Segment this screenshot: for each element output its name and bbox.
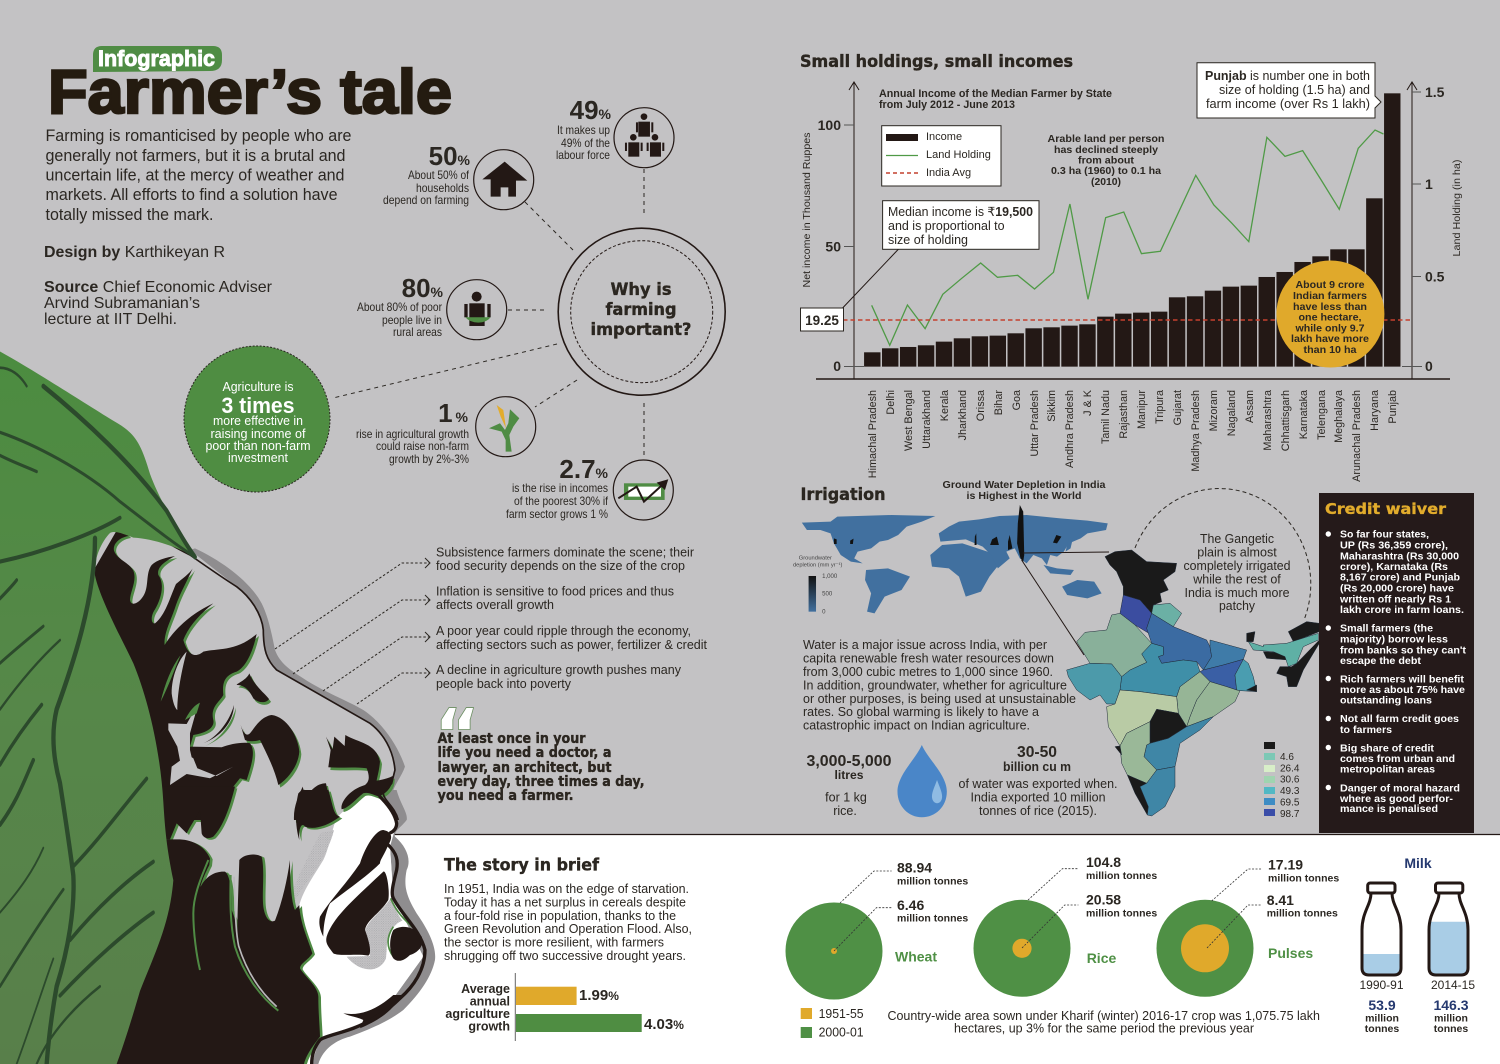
state labels: Bihar [993, 390, 1005, 415]
icon: person with green band [464, 292, 491, 326]
chart subtitle: Annual Income of the Median Farmer by State [879, 88, 1112, 100]
intro text: Farming is romanticised by people who are [46, 127, 352, 145]
bottle 2014-15: 2014-15 [1431, 978, 1475, 992]
stat: 50% households: depend on farming [383, 193, 469, 207]
state labels: Maharashtra [1262, 390, 1274, 451]
India map legend: 49.3 [1280, 786, 1300, 797]
stat: 1% agricultural growth: 1% [438, 398, 469, 428]
green turban [0, 352, 197, 1064]
chart: pulses production: 8.41 [1267, 892, 1294, 908]
credit waiver list: (Rs 20,000 crore) have [1340, 582, 1454, 594]
notes on farming risk: affects overall growth [436, 597, 554, 612]
stat: litres per kg of rice [806, 753, 892, 818]
land holding line [872, 130, 1383, 345]
stat: 1% agricultural growth: could raise non-farm [376, 439, 469, 453]
state labels: Tamil Nadu [1100, 390, 1112, 444]
text: water issue: rates. So global warming is likely to have a [803, 704, 1040, 719]
depletion legend: Groundwater [799, 556, 832, 562]
credit waiver list: from banks so they can't [1340, 644, 1467, 656]
callout: Punjab [1197, 63, 1381, 118]
bar chart: average annual agriculture growth: 4.03% [644, 1016, 684, 1033]
chart: rice production: Rice [1087, 950, 1116, 966]
state labels: Nagaland [1226, 390, 1238, 436]
India map legend: 98.7 [1280, 809, 1300, 820]
stat: 2.7% incomes: farm sector grows 1 % [506, 507, 608, 521]
notes on farming risk: A decline in agriculture growth pushes many [436, 662, 681, 677]
story text: In 1951, India was on the edge of starvation. [444, 881, 689, 896]
stat: 49% labour force: It makes up [557, 123, 610, 137]
credit waiver list: written off nearly Rs 1 [1339, 593, 1451, 605]
intro text: markets. All efforts to find a solution have [46, 186, 338, 204]
chart: pulses production: million tonnes [1267, 908, 1338, 920]
left axis values [818, 117, 841, 374]
heading: credit waiver: Credit waiver [1325, 500, 1446, 518]
stat: 50% households: About 50% of [408, 168, 470, 182]
note: arable land: from about [1078, 154, 1135, 166]
credits: Arvind Subramanian’s [44, 295, 200, 312]
bottle 2014-15: 146.3 [1433, 997, 1469, 1013]
note: arable land: 0.3 ha (1960) to 0.1 ha [1051, 165, 1161, 177]
story text: Green Revolution and Operation Flood. Also, [444, 921, 692, 936]
callout: agriculture 3 times: Agriculture is [222, 379, 294, 394]
right axis values: 0 [1425, 358, 1433, 374]
intro text: totally missed the mark. [46, 206, 214, 224]
green edge of hair [82, 534, 395, 1064]
bar chart: average annual agriculture growth: 1.99% [579, 987, 619, 1004]
depletion spikes [834, 505, 1061, 562]
stat: 80% rural: 80% [402, 273, 444, 303]
India map legend: 30.6 [1280, 775, 1300, 786]
icon: crop plant [489, 405, 519, 452]
right axis label: Land Holding (in ha) [1451, 160, 1463, 256]
callout: 9 crore farmers: have less than [1293, 301, 1367, 313]
callout: Punjab: Punjab is number one in both [1205, 69, 1370, 83]
stat: 80% rural [357, 273, 507, 340]
stat: billion cubic metres exported: of water was exported when. [958, 777, 1118, 791]
bar chart: average annual agriculture growth: growth [468, 1020, 510, 1034]
credit waiver list: more as about 75% have [1340, 684, 1465, 696]
note: Gangetic plain: India is much more [1184, 585, 1290, 600]
state labels: Goa [1011, 390, 1023, 410]
credit waiver list: lakh crore in farm loans. [1340, 604, 1464, 616]
callout: median income [843, 201, 1039, 308]
credit waiver list: Danger of moral hazard [1340, 782, 1460, 794]
state labels: Sikkim [1046, 390, 1058, 422]
stat: litres per kg of rice: 3,000-5,000 [806, 753, 892, 770]
stat: billion cubic metres exported: 30-50 [1017, 744, 1057, 761]
icon: rising arrow over banknote [618, 479, 668, 502]
chart: wheat production [786, 860, 968, 1000]
India map legend: 4.6 [1280, 752, 1294, 763]
stat: 1% agricultural growth: growth by 2%-3% [389, 452, 469, 466]
note: Gangetic plain: patchy [1219, 598, 1255, 613]
chart: rice production: million tonnes [1086, 908, 1157, 920]
axes [816, 82, 1450, 379]
chart: income and land holding by state [800, 63, 1463, 482]
intro text: uncertain life, at the mercy of weather and [46, 166, 344, 184]
quote [434, 694, 644, 804]
callout: 9 crore farmers: than 10 ha [1304, 344, 1357, 356]
depletion legend: 1,000 [822, 574, 838, 580]
story text: shrugging off two successive drought years. [444, 948, 686, 963]
state labels [867, 389, 1399, 482]
bottle 2014-15: million [1434, 1013, 1468, 1025]
callout: 9 crore farmers: lakh have more [1291, 333, 1369, 345]
chart: rice production: 104.8 [1086, 854, 1121, 870]
state labels: Himachal Pradesh [867, 390, 879, 478]
stat: 49% labour force [556, 95, 674, 168]
left axis values: 0 [833, 358, 841, 374]
right axis values [1425, 84, 1445, 374]
notes on farming risk: A poor year could ripple through the economy, [436, 623, 691, 638]
state labels: Manipur [1136, 390, 1148, 429]
India average line [843, 319, 1412, 321]
state labels: Haryana [1369, 390, 1381, 431]
chart subtitle: from July 2012 - June 2013 [879, 99, 1015, 111]
panel: the story in brief [444, 856, 692, 1041]
stat: 2.7% incomes: is the rise in incomes [512, 481, 608, 495]
note: Gangetic plain [1184, 531, 1290, 613]
production legend: 1951-55 [819, 1007, 864, 1021]
credit waiver list: Big share of credit [1340, 742, 1434, 754]
state labels: Gujarat [1172, 390, 1184, 425]
credit waiver list: outstanding loans [1340, 695, 1432, 707]
pointer lines from world map to India map [1022, 552, 1109, 655]
left axis values: 100 [818, 117, 841, 133]
leader lines from face to notes [275, 558, 430, 704]
right axis values: 1.5 [1425, 84, 1445, 100]
credit waiver list: So far four states, [1340, 529, 1429, 541]
heading: Irrigation: Irrigation [800, 485, 886, 504]
income bars [864, 93, 1400, 367]
chart: pulses production: million tonnes [1268, 873, 1339, 885]
notes on farming risk [436, 544, 707, 691]
lower face details: lips and chin [193, 797, 425, 1064]
right axis values: 0.5 [1425, 268, 1445, 284]
credit waiver list: Rich farmers will benefit [1340, 673, 1465, 685]
bar chart: average annual agriculture growth: Average [461, 982, 510, 996]
note: Kharif area sown [887, 1009, 1320, 1036]
bottle 1990-91: tonnes [1365, 1023, 1399, 1035]
callout: median income: and is proportional to [888, 219, 1005, 233]
state labels: Jharkhand [957, 390, 969, 440]
stat: 2.7% incomes: of the poorest 30% if [514, 494, 609, 508]
note: Kharif area sown: hectares, up 3% for the same period the previous year [954, 1022, 1254, 1036]
credits: Design by Karthikeyan R [44, 244, 225, 261]
note: arable land: has declined steeply [1054, 144, 1158, 156]
story text [444, 881, 692, 963]
credit waiver list: mance is penalised [1340, 803, 1438, 815]
text: water issue: Water is a major issue across India, with per [803, 637, 1048, 652]
left axis label: Net income in Thousand Ruppes [801, 132, 813, 288]
state labels: Tripura [1154, 390, 1166, 424]
bottle 2014-15 [1429, 883, 1475, 1035]
note: Gangetic plain: while the rest of [1192, 572, 1281, 587]
stat: litres per kg of rice: litres [834, 768, 864, 782]
quote: lawyer, an architect, but [438, 760, 612, 776]
note: arable land [1048, 133, 1164, 188]
icon: house [482, 162, 527, 197]
callout: agriculture 3 times: 3 times [222, 393, 294, 418]
callout: agriculture 3 times: poor than non-farm [206, 438, 310, 453]
callout: 9 crore farmers: one hectare, [1298, 312, 1362, 324]
state labels: Assam [1244, 390, 1256, 423]
chart: pulses production: 17.19 [1268, 856, 1303, 872]
credit waiver list: crore), Karnataka (Rs [1340, 561, 1448, 573]
bottle 1990-91 [1359, 883, 1404, 1035]
state labels: Kerala [939, 390, 951, 421]
stat: 49% labour force: labour force [556, 148, 610, 162]
credit waiver list: to farmers [1340, 724, 1392, 736]
state labels: Karnataka [1298, 390, 1310, 439]
bar chart: average annual agriculture growth: agriculture [445, 1007, 510, 1021]
stat: 50% households: 50% [429, 141, 471, 171]
depletion legend: depletion (mm yr⁻¹) [793, 563, 843, 569]
state labels: Uttarakhand [921, 390, 933, 449]
credit waiver list: where as good perfor- [1339, 793, 1454, 805]
India map legend: 69.5 [1280, 798, 1300, 809]
credit waiver list: comes from urban and [1340, 753, 1455, 765]
heading: milk: Milk [1404, 855, 1432, 871]
stat: 2.7% incomes: 2.7% [559, 454, 609, 484]
notes on farming risk: Inflation is sensitive to food prices and thus [436, 584, 674, 598]
state labels: West Bengal [903, 390, 915, 451]
text: water issue: from 3,000 cubic metres to 1,000 since 1960. [803, 664, 1053, 679]
stat: 50% households: households [416, 181, 469, 195]
text: water issue: In addition, groundwater, whether for agriculture [803, 678, 1067, 692]
chart: wheat production: 88.94 [897, 860, 932, 876]
note: Gangetic plain: The Gangetic [1200, 531, 1274, 546]
label: 19.25 [800, 308, 844, 331]
callout: agriculture 3 times: more effective in [213, 413, 303, 428]
central circle: why is farming important: farming [606, 300, 676, 320]
label: 19.25: 19.25 [805, 313, 839, 328]
credit waiver list [1339, 529, 1467, 815]
stat: billion cubic metres exported: India exported 10 million [970, 791, 1106, 805]
chart: wheat production: million tonnes [897, 876, 968, 888]
state labels: Uttar Pradesh [1029, 390, 1041, 457]
text: water issue [803, 637, 1076, 732]
credit waiver list: Not all farm credit goes [1340, 713, 1459, 725]
callout: 9 crore farmers [1276, 260, 1384, 368]
stat: 1% agricultural growth: rise in agricultural growth [356, 427, 469, 441]
world map: groundwater depletion [793, 505, 1108, 615]
credit waiver list: UP (Rs 36,359 crore), [1340, 539, 1448, 551]
quote: you need a farmer. [438, 788, 574, 804]
callout: agriculture 3 times: raising income of [210, 426, 306, 441]
dashed circle: Gangetic plain [1135, 489, 1311, 620]
mouth and cheek fill [160, 794, 423, 1037]
chart legend: Land Holding [926, 149, 991, 161]
black hair [80, 532, 393, 1064]
credits [44, 244, 273, 328]
stat: 49% labour force: 49% of the [561, 136, 610, 150]
stat: 80% rural: rural areas [393, 325, 442, 339]
chart legend [882, 126, 1001, 186]
icon: quote mark: “ [434, 694, 480, 776]
chart: rice production [974, 854, 1157, 997]
map: India states irrigation [1067, 550, 1319, 816]
chart legend: Income [926, 131, 962, 143]
credits: Source Chief Economic Adviser [44, 279, 273, 296]
world map title: Ground Water Depletion in India [942, 479, 1106, 491]
panel: credit waiver [1319, 493, 1474, 833]
text: water issue: capita renewable fresh water resources down [803, 650, 1054, 666]
world map title [942, 479, 1106, 502]
chart: wheat production: 6.46 [897, 897, 924, 913]
stat: 49% labour force: 49% [570, 95, 612, 125]
state labels: Meghalaya [1333, 390, 1345, 443]
state labels: Delhi [885, 390, 897, 415]
chart legend: India Avg [926, 167, 971, 179]
callout: 9 crore farmers: while only 9.7 [1294, 322, 1365, 334]
chart: pulses production: Pulses [1268, 945, 1313, 961]
depletion legend: 500 [822, 591, 833, 597]
stat: 1% agricultural growth [356, 397, 536, 466]
note: arable land: Arable land per person [1048, 133, 1164, 145]
stat: 2.7% incomes [506, 454, 673, 521]
credit waiver list: 8,167 crore) and Punjab [1340, 572, 1460, 584]
title: Farmer’s tale [48, 58, 452, 127]
callout: agriculture 3 times: investment [228, 450, 288, 465]
state labels: Arunachal Pradesh [1351, 390, 1363, 482]
credit waiver list: escape the debt [1340, 655, 1421, 667]
bullets [1326, 531, 1331, 790]
face shadow [190, 548, 435, 1064]
chart: rice production: million tonnes [1086, 870, 1157, 882]
state labels: Orissa [975, 390, 987, 421]
note: Gangetic plain: completely irrigated [1184, 558, 1290, 573]
state labels: Madhya Pradesh [1190, 390, 1202, 472]
production legend: 2000-01 [819, 1026, 864, 1040]
upper face details: eye area and profile line [132, 520, 398, 820]
notes on farming risk: people back into poverty [436, 676, 571, 691]
story text: Today it has a net surplus in cereals despite [444, 895, 686, 910]
India map legend [1264, 742, 1300, 820]
callout: median income: size of holding [888, 233, 968, 247]
chart: milk bottles [1359, 855, 1475, 1035]
central circle: why is farming important [558, 228, 725, 395]
bar chart: average annual agriculture growth [445, 973, 684, 1041]
state labels: Punjab [1387, 390, 1399, 424]
credit waiver list: Small farmers (the [1340, 623, 1433, 635]
icon: water drop [897, 745, 947, 817]
callout: 9 crore farmers: About 9 crore [1296, 279, 1365, 291]
chart subtitle [879, 88, 1112, 111]
callout: agriculture 3 times [184, 346, 330, 492]
central circle: why is farming important: important? [590, 320, 692, 340]
bottle 1990-91: 1990-91 [1359, 978, 1404, 992]
bottle 2014-15: tonnes [1434, 1023, 1468, 1035]
intro text: generally not farmers, but it is a brutal and [46, 147, 346, 165]
production legend [801, 1007, 864, 1040]
stat: billion cubic metres exported: tonnes of rice (2015). [979, 804, 1097, 818]
bar chart: average annual agriculture growth: annual [470, 994, 510, 1008]
note: Kharif area sown: Country-wide area sown under Kharif (winter) 2016-17 crop was 1,075.75 lakh [887, 1009, 1320, 1023]
state labels: Rajasthan [1118, 390, 1130, 439]
callout: median income: Median income is ₹19,500 [888, 205, 1033, 219]
story text: a four-fold rise in population, thanks to the [444, 908, 676, 923]
credit waiver list: majority) borrow less [1340, 633, 1448, 645]
state labels: Andhra Pradesh [1064, 390, 1076, 468]
credit waiver list: metropolitan areas [1340, 764, 1435, 776]
quote: every day, three times a day, [438, 774, 644, 790]
story text: the sector is more resilient, with farmers [444, 935, 664, 950]
tag: Infographic: Infographic [98, 46, 215, 71]
India map legend: 26.4 [1280, 764, 1300, 775]
heading: story in brief: The story in brief [444, 856, 600, 875]
text: water issue: or other purposes, is being used at unsustainable [803, 691, 1076, 706]
notes on farming risk: Subsistence farmers dominate the scene; their [436, 544, 695, 560]
illustration: farmer's face in profile with green turban [0, 352, 435, 1064]
state labels: J & K [1082, 389, 1094, 416]
left axis values: 50 [825, 238, 841, 254]
chart: pulses production [1156, 856, 1339, 997]
note: arable land: (2010) [1091, 176, 1121, 188]
state labels: Telengana [1316, 390, 1328, 440]
chart: wheat production: Wheat [895, 949, 937, 965]
intro text [46, 127, 352, 224]
bottle 1990-91: million [1365, 1013, 1399, 1025]
credit waiver list: Maharashtra (Rs 30,000 [1340, 550, 1459, 562]
connector lines around central circle [333, 169, 644, 458]
notes on farming risk: affecting sectors such as power, fertilizer & credit [436, 637, 707, 652]
stat: billion cubic metres exported: billion cu m [1003, 760, 1071, 774]
central circle: why is farming important: Why is [610, 280, 672, 300]
stat: litres per kg of rice: for 1 kg [825, 791, 867, 805]
credits: lecture at IIT Delhi. [44, 311, 177, 328]
stat: 80% rural: people live in [382, 313, 442, 327]
heading: small holdings: Small holdings, small incomes [800, 52, 1073, 71]
quote: life you need a doctor, a [438, 745, 612, 761]
chart: rice production: 20.58 [1086, 891, 1121, 907]
note: Gangetic plain: plain is almost [1197, 545, 1277, 560]
world map title: is Highest in the World [966, 490, 1082, 502]
callout: 9 crore farmers: Indian farmers [1293, 290, 1367, 302]
stat: litres per kg of rice: rice. [833, 804, 857, 818]
right axis values: 1 [1425, 176, 1433, 192]
depletion legend: 0 [822, 609, 826, 615]
stat: 50% households [383, 141, 534, 210]
chart: wheat production: million tonnes [897, 913, 968, 925]
stat: 80% rural: About 80% of poor [357, 300, 442, 314]
callout: Punjab: farm income (over Rs 1 lakh) [1206, 97, 1370, 111]
callout: Punjab: size of holding (1.5 ha) and [1219, 83, 1370, 97]
state labels: Mizoram [1208, 390, 1220, 431]
text: water issue: catastrophic impact on Indian agriculture. [803, 718, 1030, 732]
notes on farming risk: food security depends on the size of the crop [436, 558, 685, 573]
depletion legend [793, 556, 843, 615]
state labels: Chhattisgarh [1280, 390, 1292, 451]
quote: At least once in your [438, 731, 586, 747]
icon: three workers [625, 113, 664, 157]
bottle 1990-91: 53.9 [1368, 997, 1396, 1013]
stat: billion cubic metres exported [958, 744, 1118, 818]
